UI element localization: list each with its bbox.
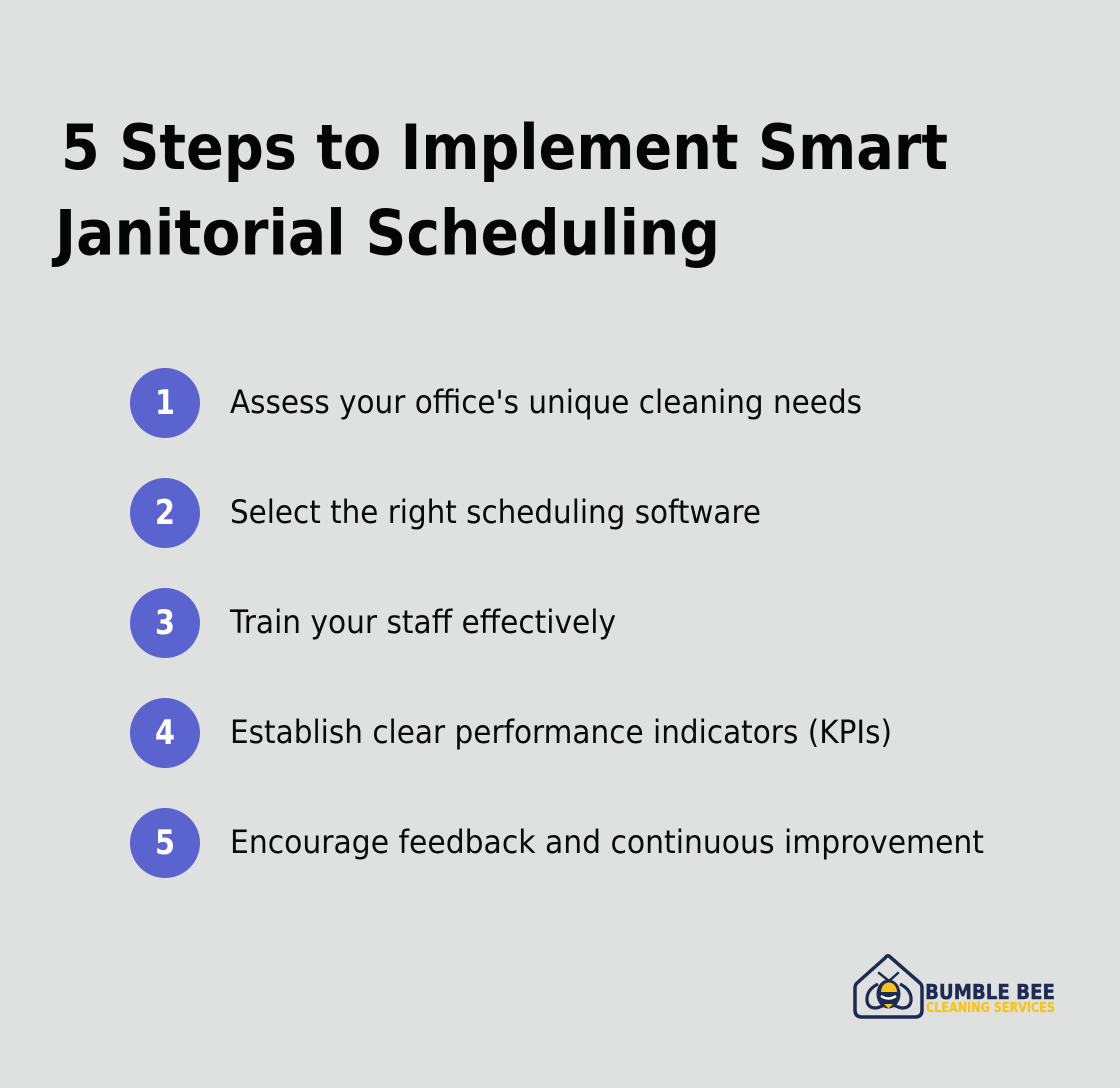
step 5: Encourage feedback and continuous improvement xyxy=(230,823,984,861)
step 4 xyxy=(130,698,892,768)
icon: house outline with bee xyxy=(855,956,922,1017)
step 5: 5 xyxy=(155,823,175,863)
step 3: 3 xyxy=(155,603,175,643)
wordmark: BUMBLE BEE xyxy=(925,980,1055,1004)
step 4: Establish clear performance indicators (KPIs) xyxy=(230,713,892,751)
title xyxy=(51,111,948,270)
step 2 xyxy=(130,478,761,548)
step 2: 2 xyxy=(155,493,175,533)
step 5 xyxy=(130,808,984,878)
tagline: CLEANING SERVICES xyxy=(926,1001,1055,1016)
title: Janitorial Scheduling xyxy=(51,196,720,270)
logo: Bumble Bee Cleaning Services xyxy=(855,956,1055,1017)
title: 5 Steps to Implement Smart xyxy=(61,111,948,184)
step 4: 4 xyxy=(155,713,175,753)
step 2: Select the right scheduling software xyxy=(230,493,761,531)
step 1 xyxy=(130,368,862,438)
step 3: Train your staff effectively xyxy=(229,603,616,641)
step 1: 1 xyxy=(155,383,175,423)
step 3 xyxy=(130,588,616,658)
step 1: Assess your office's unique cleaning needs xyxy=(230,383,862,421)
